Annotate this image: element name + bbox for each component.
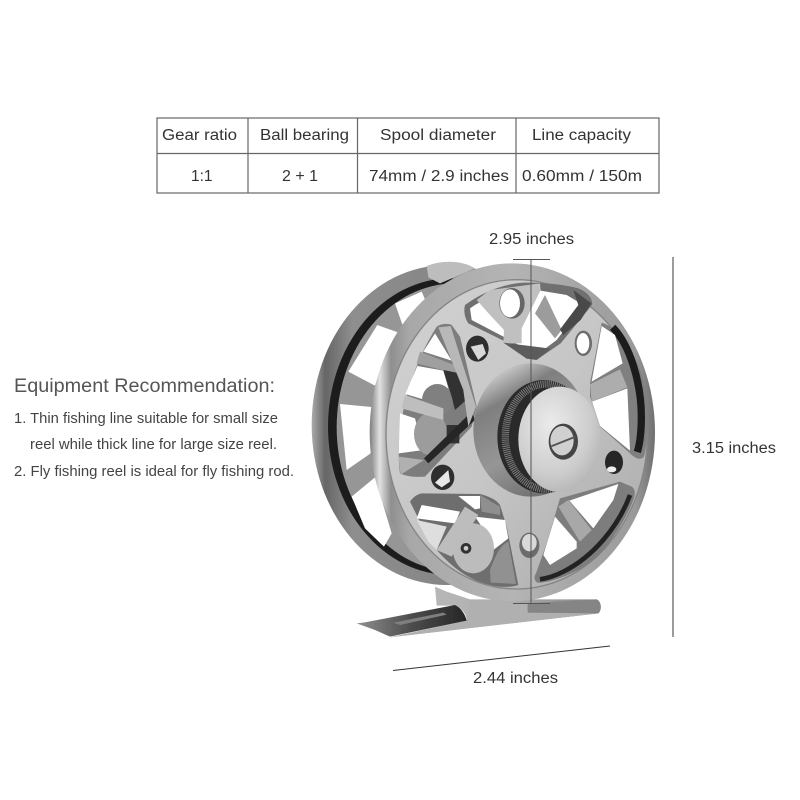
spoke [558,500,592,542]
header: ball bearing: Ball bearing [260,127,349,144]
label: 2.95 inches [489,231,574,248]
gears [422,384,453,416]
lower left window with mechanism [410,493,518,587]
dimension: foot length 2.44 inches [393,646,610,687]
knob cap [518,387,600,492]
disc with screw [453,523,494,573]
center hub [473,363,600,497]
header: spool diameter: Spool diameter [380,127,496,144]
dark blade [443,370,470,410]
value: ball bearing: 2 + 1 [282,168,318,185]
spokes [417,352,458,374]
white openings [592,326,623,382]
knurled drag knob [497,380,591,493]
value: spool diameter: 74mm / 2.9 inches [369,168,509,185]
header: gear ratio: Gear ratio [162,127,237,144]
recommendation 2: 2. Fly fishing reel is ideal for fly fishing rod. [14,464,294,480]
back ring windows [340,292,426,547]
label: 3.15 inches [692,440,776,457]
back spool ring [312,262,582,585]
right window with spokes [590,323,648,459]
label: 2.44 inches [473,670,558,687]
reel foot [357,587,601,637]
dimension: spool width 2.95 inches [489,231,574,604]
equipment recommendation text block [14,376,294,480]
white openings [417,505,460,523]
recommendation 1, line 2: reel while thick line for large size reel. [30,437,277,453]
top window with keyhole bracket [464,283,592,360]
specification table [157,118,659,193]
value: line capacity: 0.60mm / 150m [522,168,642,185]
value: gear ratio: 1:1 [191,168,213,185]
lower right window with spokes [535,482,635,583]
left window with drag gears [398,324,477,477]
screw [549,424,578,460]
recommendation 1, line 1: 1. Thin fishing line suitable for small size [14,411,278,427]
fly fishing reel illustration [312,262,655,637]
spokes [437,507,478,557]
front rim and star face [370,263,655,601]
star frame holes [431,331,623,558]
heading: Equipment Recommendation: [14,376,275,397]
header: line capacity: Line capacity [532,127,631,144]
spoke [590,369,627,402]
white openings [423,333,452,361]
white openings [569,484,618,528]
